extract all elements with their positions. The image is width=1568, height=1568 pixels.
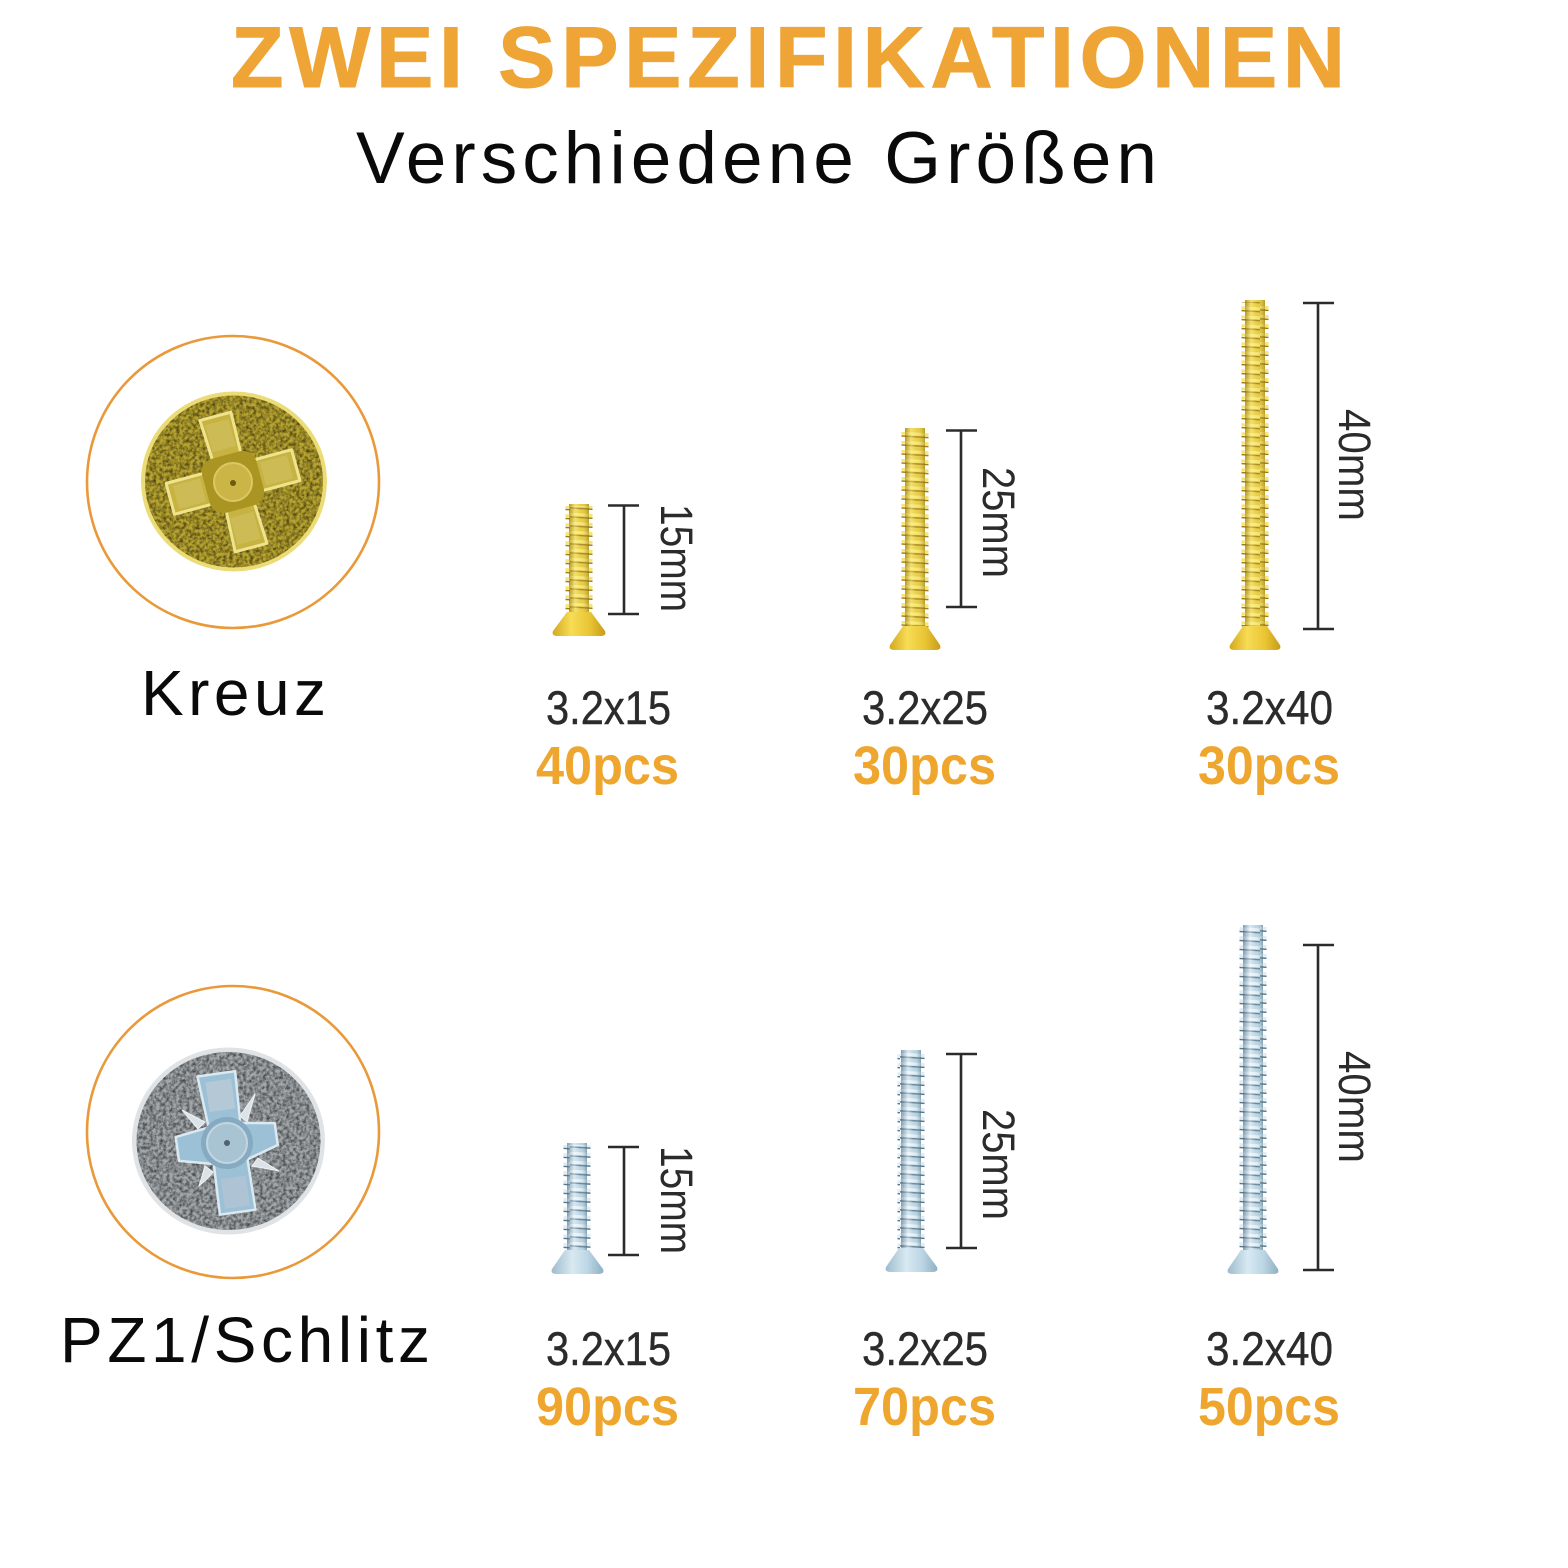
- icon: gold screw head in orange circle: [87, 336, 379, 628]
- label: Kreuz: Kreuz: [141, 657, 326, 729]
- dimension text: 25mm: [973, 1109, 1024, 1220]
- panel: silver PZ1 row: [60, 925, 1380, 1437]
- quantity: 30pcs: [853, 736, 996, 796]
- size label: 3.2x15: [546, 681, 671, 734]
- quantity: 90pcs: [536, 1377, 679, 1437]
- quantity: 50pcs: [1198, 1377, 1340, 1437]
- panel: gold cross-head row: [87, 300, 1380, 796]
- label: PZ1/Schlitz: PZ1/Schlitz: [60, 1304, 430, 1376]
- size group: silver 25mm: [853, 1050, 1024, 1437]
- size label: 3.2x25: [862, 1322, 988, 1375]
- size label: 3.2x40: [1206, 681, 1333, 734]
- dimension: 40mm: [1303, 303, 1334, 629]
- screw: silver 3.2x25: [886, 1050, 937, 1272]
- screw: gold 3.2x25: [890, 428, 940, 650]
- screw: gold 3.2x15: [553, 504, 605, 636]
- quantity: 40pcs: [536, 736, 679, 796]
- title: ZWEI SPEZIFIKATIONEN: [231, 10, 1345, 106]
- quantity: 30pcs: [1198, 736, 1340, 796]
- quantity: 70pcs: [853, 1377, 996, 1437]
- dimension text: 15mm: [651, 1146, 702, 1254]
- size label: 3.2x25: [862, 681, 988, 734]
- dimension: 15mm: [608, 1147, 639, 1255]
- dimension: 25mm: [946, 430, 977, 607]
- size group: gold 40mm: [1198, 300, 1380, 796]
- subtitle: Verschiedene Größen: [356, 118, 1157, 199]
- screw: silver 3.2x15: [552, 1143, 603, 1274]
- dimension text: 25mm: [973, 467, 1024, 578]
- size group: silver 15mm: [536, 1143, 702, 1437]
- icon: silver screw head in orange circle: [87, 986, 379, 1278]
- dimension text: 15mm: [651, 504, 702, 612]
- dimension text: 40mm: [1329, 1051, 1380, 1163]
- screw: gold 3.2x40: [1230, 300, 1280, 650]
- size group: gold 25mm: [853, 428, 1024, 796]
- dimension: 15mm: [608, 506, 639, 614]
- dimension: 25mm: [946, 1054, 977, 1248]
- dimension: 40mm: [1303, 945, 1334, 1270]
- screw: silver 3.2x40: [1228, 925, 1278, 1274]
- size label: 3.2x40: [1206, 1322, 1333, 1375]
- size group: silver 40mm: [1198, 925, 1380, 1437]
- dimension text: 40mm: [1329, 409, 1380, 521]
- size label: 3.2x15: [546, 1322, 671, 1375]
- size group: gold 15mm: [536, 504, 702, 796]
